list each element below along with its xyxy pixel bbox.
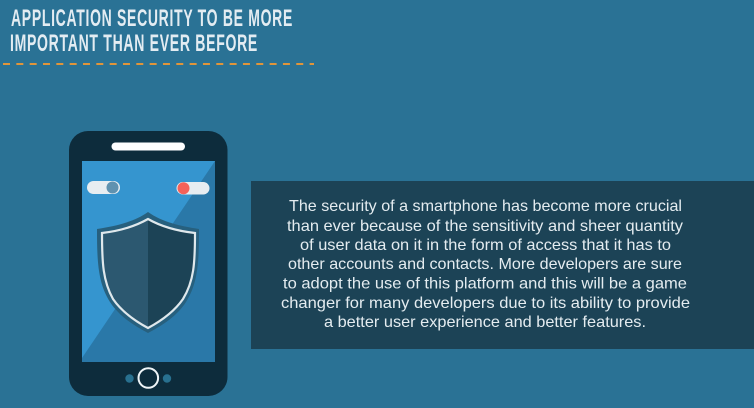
- toggle: right switch: [176, 182, 210, 194]
- panel: description: [251, 181, 754, 349]
- home button: [138, 368, 158, 388]
- icon: smartphone with security shield: [69, 131, 228, 396]
- title: IMPORTANT THAN EVER BEFORE: [10, 30, 258, 57]
- description text: other accounts and contacts. More developers are sure: [288, 256, 682, 273]
- description text: to adopt the use of this platform and this will be a game: [283, 276, 687, 292]
- description text: than ever because of the sensitivity and sheer quantity: [287, 218, 683, 235]
- title: [10, 5, 293, 57]
- phone body: [69, 131, 228, 396]
- dashed orange divider: [3, 63, 314, 65]
- left button dot: [125, 374, 134, 383]
- title: APPLICATION SECURITY TO BE MORE: [11, 5, 293, 32]
- description text: a better user experience and better features.: [324, 314, 646, 331]
- description text: The security of a smartphone has become more crucial: [289, 198, 682, 215]
- description text: of user data on it in the form of access that it has to: [300, 237, 671, 254]
- description text: changer for many developers due to its ability to provide: [281, 295, 690, 312]
- toggle: left switch: [87, 181, 120, 194]
- phone screen: [82, 161, 215, 362]
- description text: [281, 198, 690, 331]
- panel background: [251, 181, 754, 349]
- speaker bar: [112, 142, 185, 150]
- icon: shield: [97, 212, 199, 333]
- right button dot: [163, 374, 171, 383]
